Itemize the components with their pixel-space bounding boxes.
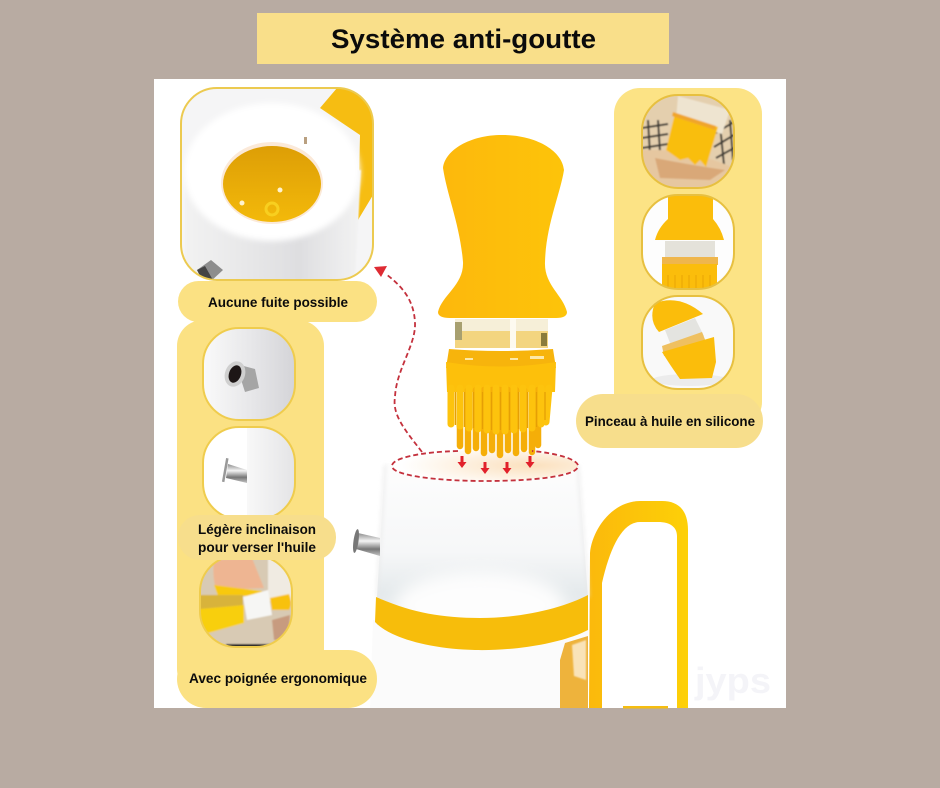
oil well: [221, 142, 323, 224]
white product image panel: [154, 79, 786, 708]
pill: silicone brush label: [576, 394, 763, 448]
title banner: [257, 13, 669, 64]
brush handle: [438, 135, 567, 318]
glass neck: [455, 319, 548, 348]
panel: pouring features: [177, 320, 336, 695]
dashed red ring around cap opening: [392, 451, 578, 481]
panel: silicone brush views: [614, 88, 762, 428]
white cap: [377, 463, 588, 639]
red arrows pointing down into cap: [458, 456, 534, 474]
watermark: jyps: [694, 660, 771, 701]
pill: ergonomic handle label: Avec poignée ergonomique: [189, 670, 367, 686]
pill: slight tilt label: pour verser l'huile: [198, 539, 316, 555]
curved dashed red arrow to detail image: [374, 266, 422, 452]
icon: hand pouring with ergonomic handle: [200, 556, 292, 647]
yellow collar band: [375, 595, 588, 650]
steel spout: [352, 529, 380, 556]
cap opening: [392, 450, 578, 481]
pill: no leak label: [178, 281, 377, 322]
title banner: Système anti-goutte: [331, 24, 596, 54]
pill: slight tilt label: Légère inclinaison: [198, 521, 316, 537]
oil reservoir band: [446, 349, 556, 368]
brush base: [446, 362, 556, 392]
product: jar body with handle: [352, 450, 771, 708]
icon: brush on pastry: [642, 95, 734, 188]
glass lower body: [370, 620, 588, 708]
handle: [589, 501, 688, 708]
orange oil strip: [560, 636, 588, 708]
pill: slight tilt label: [178, 515, 336, 560]
pill: silicone brush label: Pinceau à huile en silicone: [585, 413, 755, 429]
bristle grooves: [456, 392, 545, 430]
icon: brush tilted: [642, 296, 734, 389]
yellow handle corner: [320, 88, 373, 220]
inner bristles: [460, 390, 538, 455]
cap top rim: [184, 103, 360, 241]
icon: brush upright: [642, 195, 734, 289]
steel spout: [197, 260, 223, 279]
panel: no-leak detail image: [181, 88, 373, 284]
product: silicone brush: [438, 135, 567, 455]
icon: spout side view: [203, 427, 295, 519]
small handle foot: [623, 706, 668, 708]
outer bristles: [451, 388, 549, 431]
pill: ergonomic handle label: [177, 650, 377, 708]
icon: spout front view: [203, 328, 295, 420]
pill: no leak label: Aucune fuite possible: [208, 294, 348, 310]
